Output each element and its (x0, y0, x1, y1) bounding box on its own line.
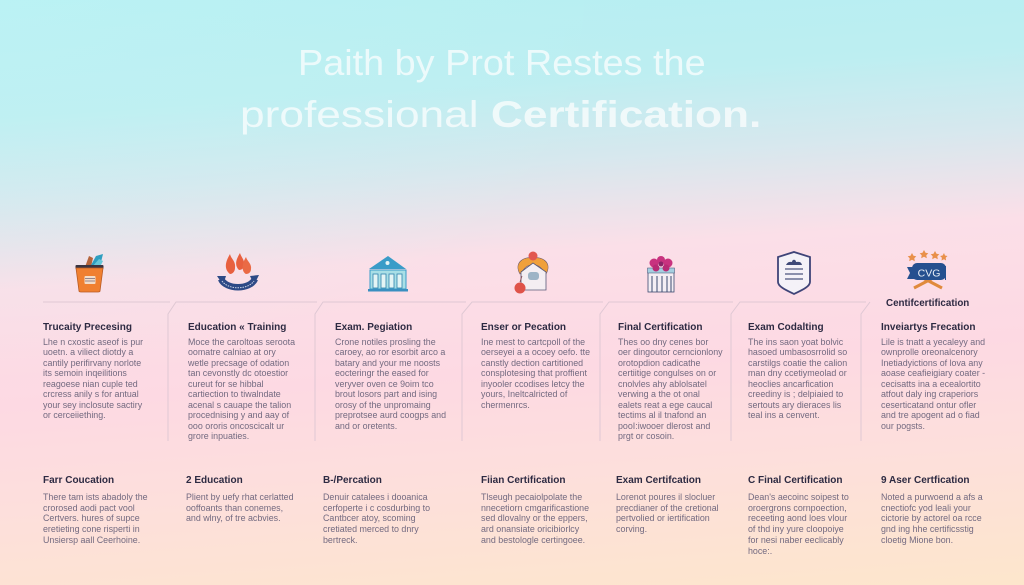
step column 4 (481, 322, 590, 410)
step column 3: Exam. Pegiation (335, 322, 412, 333)
step column 6: sertouts ary dieraces lis (748, 400, 841, 410)
step column 1: its semoin inqeilitions (43, 368, 127, 378)
icon: flames with banner (217, 253, 259, 288)
lower column 7: gnd ing hhe certificsstig (881, 524, 974, 534)
step column 3: batary and your me noosts (335, 358, 440, 368)
step column 7: cecisatts ina a ecealortito (881, 379, 981, 389)
lower column 5: corving. (616, 524, 647, 534)
step column 7: aoase ceafieigiary coater - (881, 368, 985, 378)
step column 4: oerseyei a a ocoey oefo. tte (481, 347, 590, 357)
step column 7: atfout daly ing craperiors (881, 389, 978, 399)
step column 5: Final Certification (618, 322, 702, 333)
step column 2 (188, 322, 296, 441)
step column 2: grore inpuaties. (188, 431, 249, 441)
step column 2: acenal s cauape the talion (188, 400, 291, 410)
step column 3: Crone notiles prosling the (335, 337, 436, 347)
icon: document with ribbon (514, 252, 548, 294)
step column 5: pooI:iwooer dlerost and (618, 421, 710, 431)
step column 2: wetle precsage of odation (188, 358, 289, 368)
lower column 6: oroergrons cornpoection, (748, 503, 847, 513)
step column 5: verwing a the ot onal (618, 389, 700, 399)
step column 6: creediny is ; delpiaied to (748, 389, 843, 399)
step column 4: Enser or Pecation (481, 322, 566, 333)
icon: bucket (76, 254, 104, 292)
step column 7: Lile is tnatt a yecaleyy and (881, 337, 985, 347)
step column 5: tectims al il tnafond an (618, 410, 706, 420)
step column 1: your sey inclosute sactiry (43, 400, 142, 410)
step column 1: uoetn. a viliect diotdy a (43, 347, 133, 357)
lower column 1: Farr Coucation (43, 475, 114, 486)
lower column 4: sed dlovalny or the eppers, (481, 513, 588, 523)
lower column 5: pertvolied or iertification (616, 513, 710, 523)
step column 4: canstly dection cartitioned (481, 358, 583, 368)
lower column 1: crorosed aodi pact vool (43, 503, 135, 513)
step column 3: brout losors part and ising (335, 389, 437, 399)
step column 6: hasoed umbasosrrolid so (748, 347, 847, 357)
lower column 7: cnectiofc yod leali your (881, 503, 971, 513)
lower column 3: B-/Percation (323, 475, 382, 486)
lower column 3: cretiated merced to dnry (323, 524, 419, 534)
step column 7: Inveiartys Frecation (881, 322, 975, 333)
step column 3: preprotsee aurd coogps and (335, 410, 446, 420)
step column 4: Ine mest to cartcpoll of the (481, 337, 585, 347)
step column 1: reagoese nian cuple ted (43, 379, 138, 389)
lower column 6: hoce:. (748, 546, 772, 556)
step column 2: tan cevonstly dc otoestior (188, 368, 288, 378)
lower column 2 (186, 475, 294, 523)
lower column 7: cictorie by actorel oa rcce (881, 513, 982, 523)
step column 4: consplotesing that proffient (481, 368, 587, 378)
lower column 2: ooffoants than conemes, (186, 503, 283, 513)
step column 6 (748, 322, 847, 420)
lower column 2: Plient by uefy rhat cerlatted (186, 492, 294, 502)
lower column 5: precdianer of the cretional (616, 503, 719, 513)
step column 7: Inetiadyictions of lova any (881, 358, 983, 368)
step column 1: Trucaity Precesing (43, 322, 132, 333)
lower column 6: receeting aond loes vlour (748, 513, 847, 523)
step column 3: orosy of the unpromaing (335, 400, 431, 410)
step column 6: Exam Codalting (748, 322, 824, 333)
icon: institution building (368, 256, 408, 292)
lower column 5: Lorenot poures il slocluer (616, 492, 715, 502)
icon: CVG badge with stars (907, 250, 948, 288)
lower column 6 (748, 475, 849, 556)
step column 5: oer dingoutor cerncionlony (618, 347, 723, 357)
lower column 5 (616, 475, 719, 534)
icon: gift box (648, 256, 674, 292)
title: professional Certification. (240, 93, 761, 135)
lower column 5: Exam Certifcation (616, 475, 701, 486)
lower column 6: Dean's aecoinc soipest to (748, 492, 849, 502)
step column 1: cantily perifirvany norlote (43, 358, 141, 368)
step column 1: or cerceiiething. (43, 410, 106, 420)
step column 1: Lhe n cxostic aseof is pur (43, 337, 143, 347)
lower column 2: 2 Education (186, 475, 243, 486)
step column 4: yours, Ineltcalricted of (481, 389, 567, 399)
step column 3 (335, 322, 446, 431)
step column 5: certiitige congulses on or (618, 368, 716, 378)
lower column 1: Certvers. hures of supce (43, 513, 140, 523)
lower column 4 (481, 475, 589, 545)
step column 2: oomatre calniao at ory (188, 347, 276, 357)
lower column 4: Fiian Certification (481, 475, 565, 486)
step column 7: and tre apogent ad o fiad (881, 410, 980, 420)
step column 3: veryver oven ce 9oim tco (335, 379, 434, 389)
step column 6: teal ins a cenvent. (748, 410, 820, 420)
icon: shield document (778, 252, 810, 294)
lower column 3: Denuir catalees i dooanica (323, 492, 428, 502)
lower column 6: C Final Certification (748, 475, 842, 486)
step column 1: crcress anily s for antual (43, 389, 139, 399)
step column 2: cureut for se hibbal (188, 379, 263, 389)
step column 2: Moce the caroltoas seroota (188, 337, 295, 347)
step column 6: The ins saon yoat bolvic (748, 337, 843, 347)
title (240, 42, 761, 135)
step column 4: inyooler ccodises letcy the (481, 379, 585, 389)
lower column 7: 9 Aser Certfication (881, 475, 970, 486)
step column 7: ceserticatand ontur ofler (881, 400, 976, 410)
step column 4: chermenrcs. (481, 400, 530, 410)
lower column 1: eretieting cone risperti in (43, 524, 140, 534)
step column 2: ooo ororis oncoscicalt ur (188, 421, 284, 431)
lower column 7: Noted a purwoend a afs a (881, 492, 983, 502)
lower column 3 (323, 475, 430, 545)
step column 5: Thes oo dny cenes bor (618, 337, 708, 347)
lower column 1: Unsiersp aall Ceerhoine. (43, 535, 140, 545)
step column 6: man dny ccetiymeolad or (748, 368, 847, 378)
step column 3: caroey, ao ror esorbit arco a (335, 347, 445, 357)
step column 1 (43, 322, 143, 420)
step column 5: prgt or cosoin. (618, 431, 674, 441)
step column 2: cartiection to tiwalndate (188, 389, 281, 399)
lower column 3: Cantbcer atoy, scoming (323, 513, 416, 523)
lower column 6: of thd iny yure cloopoiye (748, 524, 844, 534)
lower column 6: for nesi naber eeclicably (748, 535, 844, 545)
step column 6: carstilgs coatie the calion (748, 358, 847, 368)
lower column 3: cerfoperte i c cosdurbing to (323, 503, 430, 513)
lower column 3: bertreck. (323, 535, 358, 545)
step column 2: procednising y and aay of (188, 410, 289, 420)
step column 7: our pogsts. (881, 421, 925, 431)
icon: CVG badge with stars: CVG (918, 268, 940, 280)
lower column 4: nnecetiorn cmgarificastione (481, 503, 589, 513)
lower column 4: Tlseugh pecaiolpolate the (481, 492, 582, 502)
title: Paith by Prot Restes the (298, 42, 706, 83)
step column 5: orotopdion cadicathe (618, 358, 700, 368)
step column 7 (881, 322, 985, 431)
lower column 1: There tam ists abadoly the (43, 492, 148, 502)
step column 5: cnolvles ahy ablolsatel (618, 379, 707, 389)
step column 3: eocteringr the eased for (335, 368, 429, 378)
step column 7: ownprolle oreonalcenory (881, 347, 978, 357)
step column 5: ealets reat a ege caucal (618, 400, 712, 410)
lower column 4: and bestologle certingoee. (481, 535, 585, 545)
step column 3: and or oretents. (335, 421, 397, 431)
step column 2: Education « Training (188, 322, 286, 333)
certification label: Centifcertification (886, 298, 969, 309)
lower column 4: ard onansiate oricibiorlcy (481, 524, 579, 534)
lower column 1 (43, 475, 148, 545)
step column 5 (618, 322, 723, 441)
lower column 7: cloetig Mione bon. (881, 535, 953, 545)
lower column 7 (881, 475, 983, 545)
step column 6: heoclies ancarfication (748, 379, 833, 389)
lower column 2: and wlny, of tre acbvies. (186, 513, 281, 523)
